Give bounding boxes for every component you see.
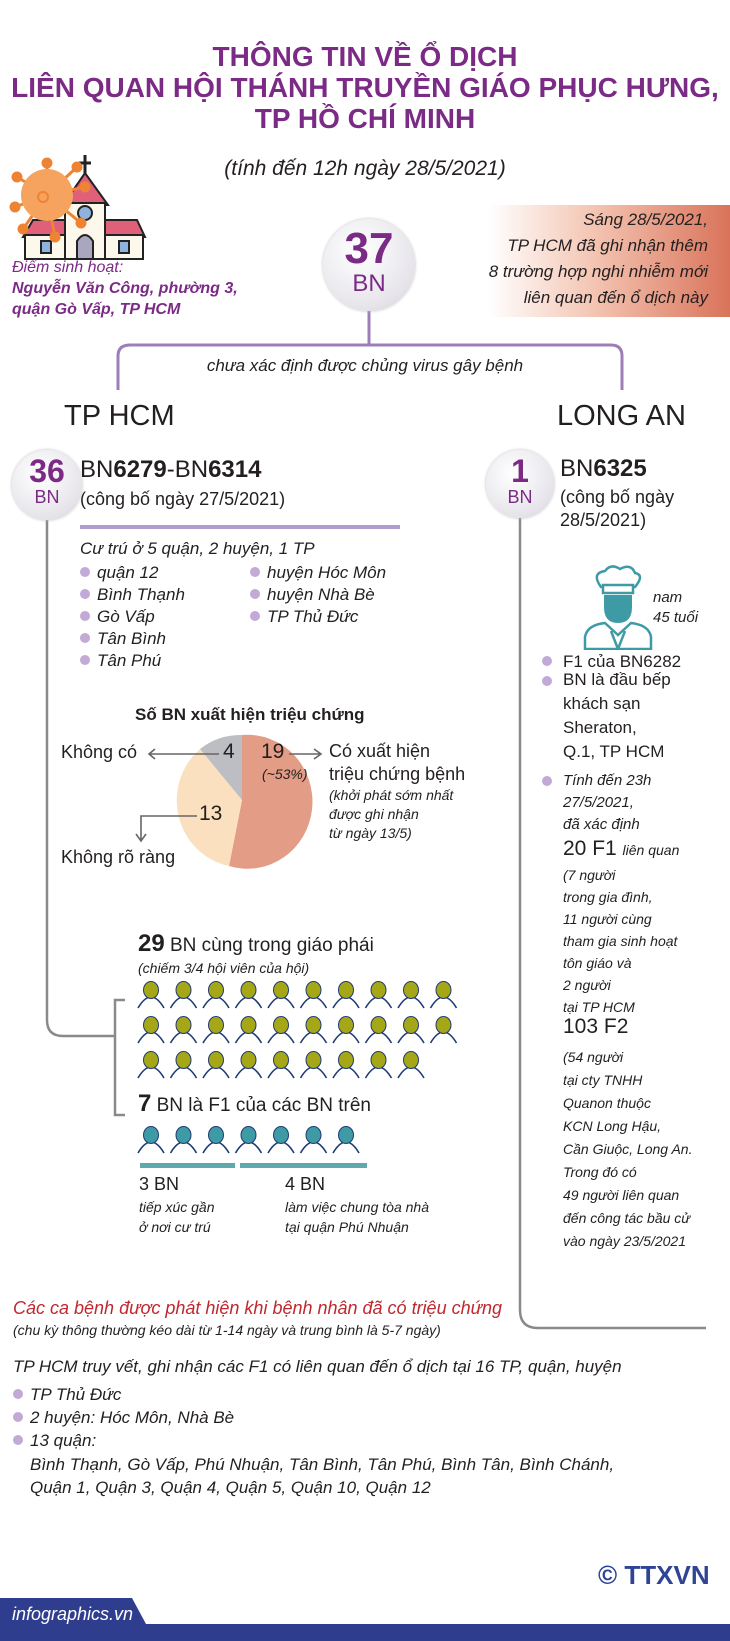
text: Tân Bình bbox=[97, 629, 166, 648]
text: Sheraton, bbox=[563, 718, 637, 737]
text: Bình Thạnh bbox=[97, 585, 185, 604]
pie chart: symptoms: (khởi phát sớm nhất bbox=[329, 787, 453, 803]
text: liên quan đến ổ dịch này bbox=[524, 288, 708, 307]
pie chart: symptoms: Không rõ ràng bbox=[61, 847, 175, 867]
text: 8 trường hợp nghi nhiễm mới bbox=[489, 262, 708, 281]
bracket label: chưa xác định được chủng virus gây bệnh bbox=[207, 356, 523, 375]
text: vào ngày 23/5/2021 bbox=[563, 1233, 686, 1249]
text: tôn giáo và bbox=[563, 955, 632, 971]
text: quận 12 bbox=[97, 563, 158, 582]
pie chart: symptoms: từ ngày 13/5) bbox=[329, 825, 412, 841]
text: TP Thủ Đức bbox=[267, 607, 358, 626]
text: 2 huyện: Hóc Môn, Nhà Bè bbox=[30, 1408, 234, 1427]
text: ở nơi cư trú bbox=[139, 1219, 211, 1235]
pie chart: symptoms: Không có bbox=[61, 742, 137, 762]
group: 7 BN: 7 BN là F1 của các BN trên bbox=[138, 1090, 371, 1117]
pie chart: symptoms: 19 bbox=[261, 740, 284, 763]
text: infographics.vn bbox=[12, 1604, 133, 1624]
text: 2 người bbox=[563, 977, 611, 993]
text: 11 người cùng bbox=[563, 911, 652, 927]
text: Quận 1, Quận 3, Quận 4, Quận 5, Quận 10, Quận 12 bbox=[30, 1478, 431, 1497]
Long An case id: BN6325 bbox=[560, 455, 647, 482]
text: Quanon thuộc bbox=[563, 1095, 651, 1111]
text: 45 tuổi bbox=[653, 609, 698, 626]
icon: chef bbox=[584, 565, 652, 650]
text: F1 của BN6282 bbox=[563, 652, 681, 671]
pie chart: symptoms: triệu chứng bệnh bbox=[329, 764, 465, 784]
text: khách sạn bbox=[563, 694, 640, 713]
text: Cần Giuộc, Long An. bbox=[563, 1141, 692, 1157]
circle 36 BN: 36 bbox=[29, 453, 65, 489]
subtitle: (tính đến 12h ngày 28/5/2021) bbox=[224, 157, 506, 180]
text: Trong đó có bbox=[563, 1164, 637, 1180]
title: TP HỒ CHÍ MINH bbox=[255, 103, 475, 134]
title: LIÊN QUAN HỘI THÁNH TRUYỀN GIÁO PHỤC HƯNG, bbox=[11, 72, 719, 103]
text: BN là đầu bếp bbox=[563, 670, 671, 689]
text: 28/5/2021) bbox=[560, 510, 646, 530]
footer bbox=[0, 1598, 730, 1641]
circle 36 BN: BN bbox=[34, 487, 60, 507]
heading: TP HCM: TP HCM bbox=[64, 400, 175, 432]
text: đã xác định bbox=[563, 816, 640, 833]
circle 1 BN: BN bbox=[507, 487, 532, 507]
total circle 37 BN bbox=[323, 219, 415, 311]
location text: Điểm sinh hoạt: bbox=[12, 259, 123, 276]
text: (7 người bbox=[563, 867, 615, 883]
text: 4 BN bbox=[285, 1174, 325, 1194]
text: TP HCM đã ghi nhận thêm bbox=[507, 236, 708, 255]
text: TP Thủ Đức bbox=[30, 1385, 121, 1404]
pie chart: symptoms: Số BN xuất hiện triệu chứng bbox=[135, 705, 365, 724]
title: THÔNG TIN VỀ Ổ DỊCH bbox=[213, 41, 517, 72]
text: (54 người bbox=[563, 1049, 623, 1065]
group: 29 BN: 29 BN cùng trong giáo phái bbox=[138, 930, 374, 957]
text: tại TP HCM bbox=[563, 999, 635, 1015]
text: Bình Thạnh, Gò Vấp, Phú Nhuận, Tân Bình, Tân Phú, Bình Tân, Bình Chánh, bbox=[30, 1455, 614, 1474]
Long An details bbox=[542, 656, 552, 666]
text: đến công tác bầu cử bbox=[563, 1210, 690, 1226]
text: Tân Phú bbox=[97, 651, 161, 670]
text: 20 F1 liên quan bbox=[563, 837, 679, 860]
pie chart: symptoms: 13 bbox=[199, 802, 222, 825]
pie chart: symptoms: được ghi nhận bbox=[329, 806, 419, 822]
text: tiếp xúc gần bbox=[139, 1199, 214, 1215]
note: symptoms: Các ca bệnh được phát hiện khi bệnh nhân đã có triệu chứng bbox=[13, 1298, 502, 1318]
icons: 7 people bbox=[137, 1126, 367, 1168]
HCM case ids bbox=[80, 456, 285, 509]
text: Tính đến 23h bbox=[563, 772, 651, 789]
text: Sáng 28/5/2021, bbox=[583, 210, 708, 229]
text: tham gia sinh hoạt bbox=[563, 933, 677, 949]
text: (chiếm 3/4 hội viên của hội) bbox=[138, 960, 309, 976]
circle 1 BN: 1 bbox=[511, 453, 529, 489]
text: làm việc chung tòa nhà bbox=[285, 1199, 429, 1215]
icon: church with virus bbox=[10, 155, 146, 260]
callout: new cases bbox=[488, 205, 730, 317]
text: 103 F2 bbox=[563, 1015, 628, 1038]
text: trong gia đình, bbox=[563, 889, 653, 905]
text: 13 quận: bbox=[30, 1431, 96, 1450]
text: huyện Hóc Môn bbox=[267, 563, 386, 582]
residence list: Cư trú ở 5 quận, 2 huyện, 1 TP bbox=[80, 539, 315, 558]
heading: LONG AN: LONG AN bbox=[557, 400, 686, 432]
location text: Nguyễn Văn Công, phường 3, bbox=[12, 280, 238, 297]
total circle 37 BN: BN bbox=[352, 270, 386, 297]
icons: 29 people bbox=[137, 981, 458, 1078]
pie chart: symptoms: Có xuất hiện bbox=[329, 741, 430, 761]
text: Q.1, TP HCM bbox=[563, 742, 664, 761]
HCM case ids: (công bố ngày 27/5/2021) bbox=[80, 489, 285, 509]
text: tại cty TNHH bbox=[563, 1072, 642, 1088]
text: (chu kỳ thông thường kéo dài từ 1-14 ngày và trung bình là 5-7 ngày) bbox=[13, 1322, 441, 1338]
title bbox=[11, 41, 719, 134]
text: 49 người liên quan bbox=[563, 1187, 679, 1203]
text: 27/5/2021, bbox=[563, 794, 634, 811]
text: Gò Vấp bbox=[97, 607, 155, 626]
text: huyện Nhà Bè bbox=[267, 585, 375, 604]
location text: quận Gò Vấp, TP HCM bbox=[12, 301, 180, 318]
pie chart: symptoms bbox=[61, 705, 465, 869]
circle 1 BN bbox=[486, 450, 554, 518]
text: tại quận Phú Nhuận bbox=[285, 1219, 409, 1235]
text: (công bố ngày bbox=[560, 487, 674, 507]
circle 36 BN bbox=[12, 450, 82, 520]
text: KCN Long Hậu, bbox=[563, 1118, 661, 1134]
HCM case ids: BN6279-BN6314 bbox=[80, 456, 261, 483]
logo: TTXVN: © TTXVN bbox=[598, 1560, 710, 1590]
pie chart: symptoms: (~53%) bbox=[262, 766, 308, 782]
pie chart: symptoms: 4 bbox=[223, 740, 235, 763]
total circle 37 BN: 37 bbox=[345, 224, 393, 273]
text: 3 BN bbox=[139, 1174, 179, 1194]
location text bbox=[12, 259, 238, 318]
text: nam bbox=[653, 589, 682, 606]
tracing list: TP HCM truy vết, ghi nhận các F1 có liên quan đến ổ dịch tại 16 TP, quận, huyện bbox=[13, 1357, 622, 1376]
